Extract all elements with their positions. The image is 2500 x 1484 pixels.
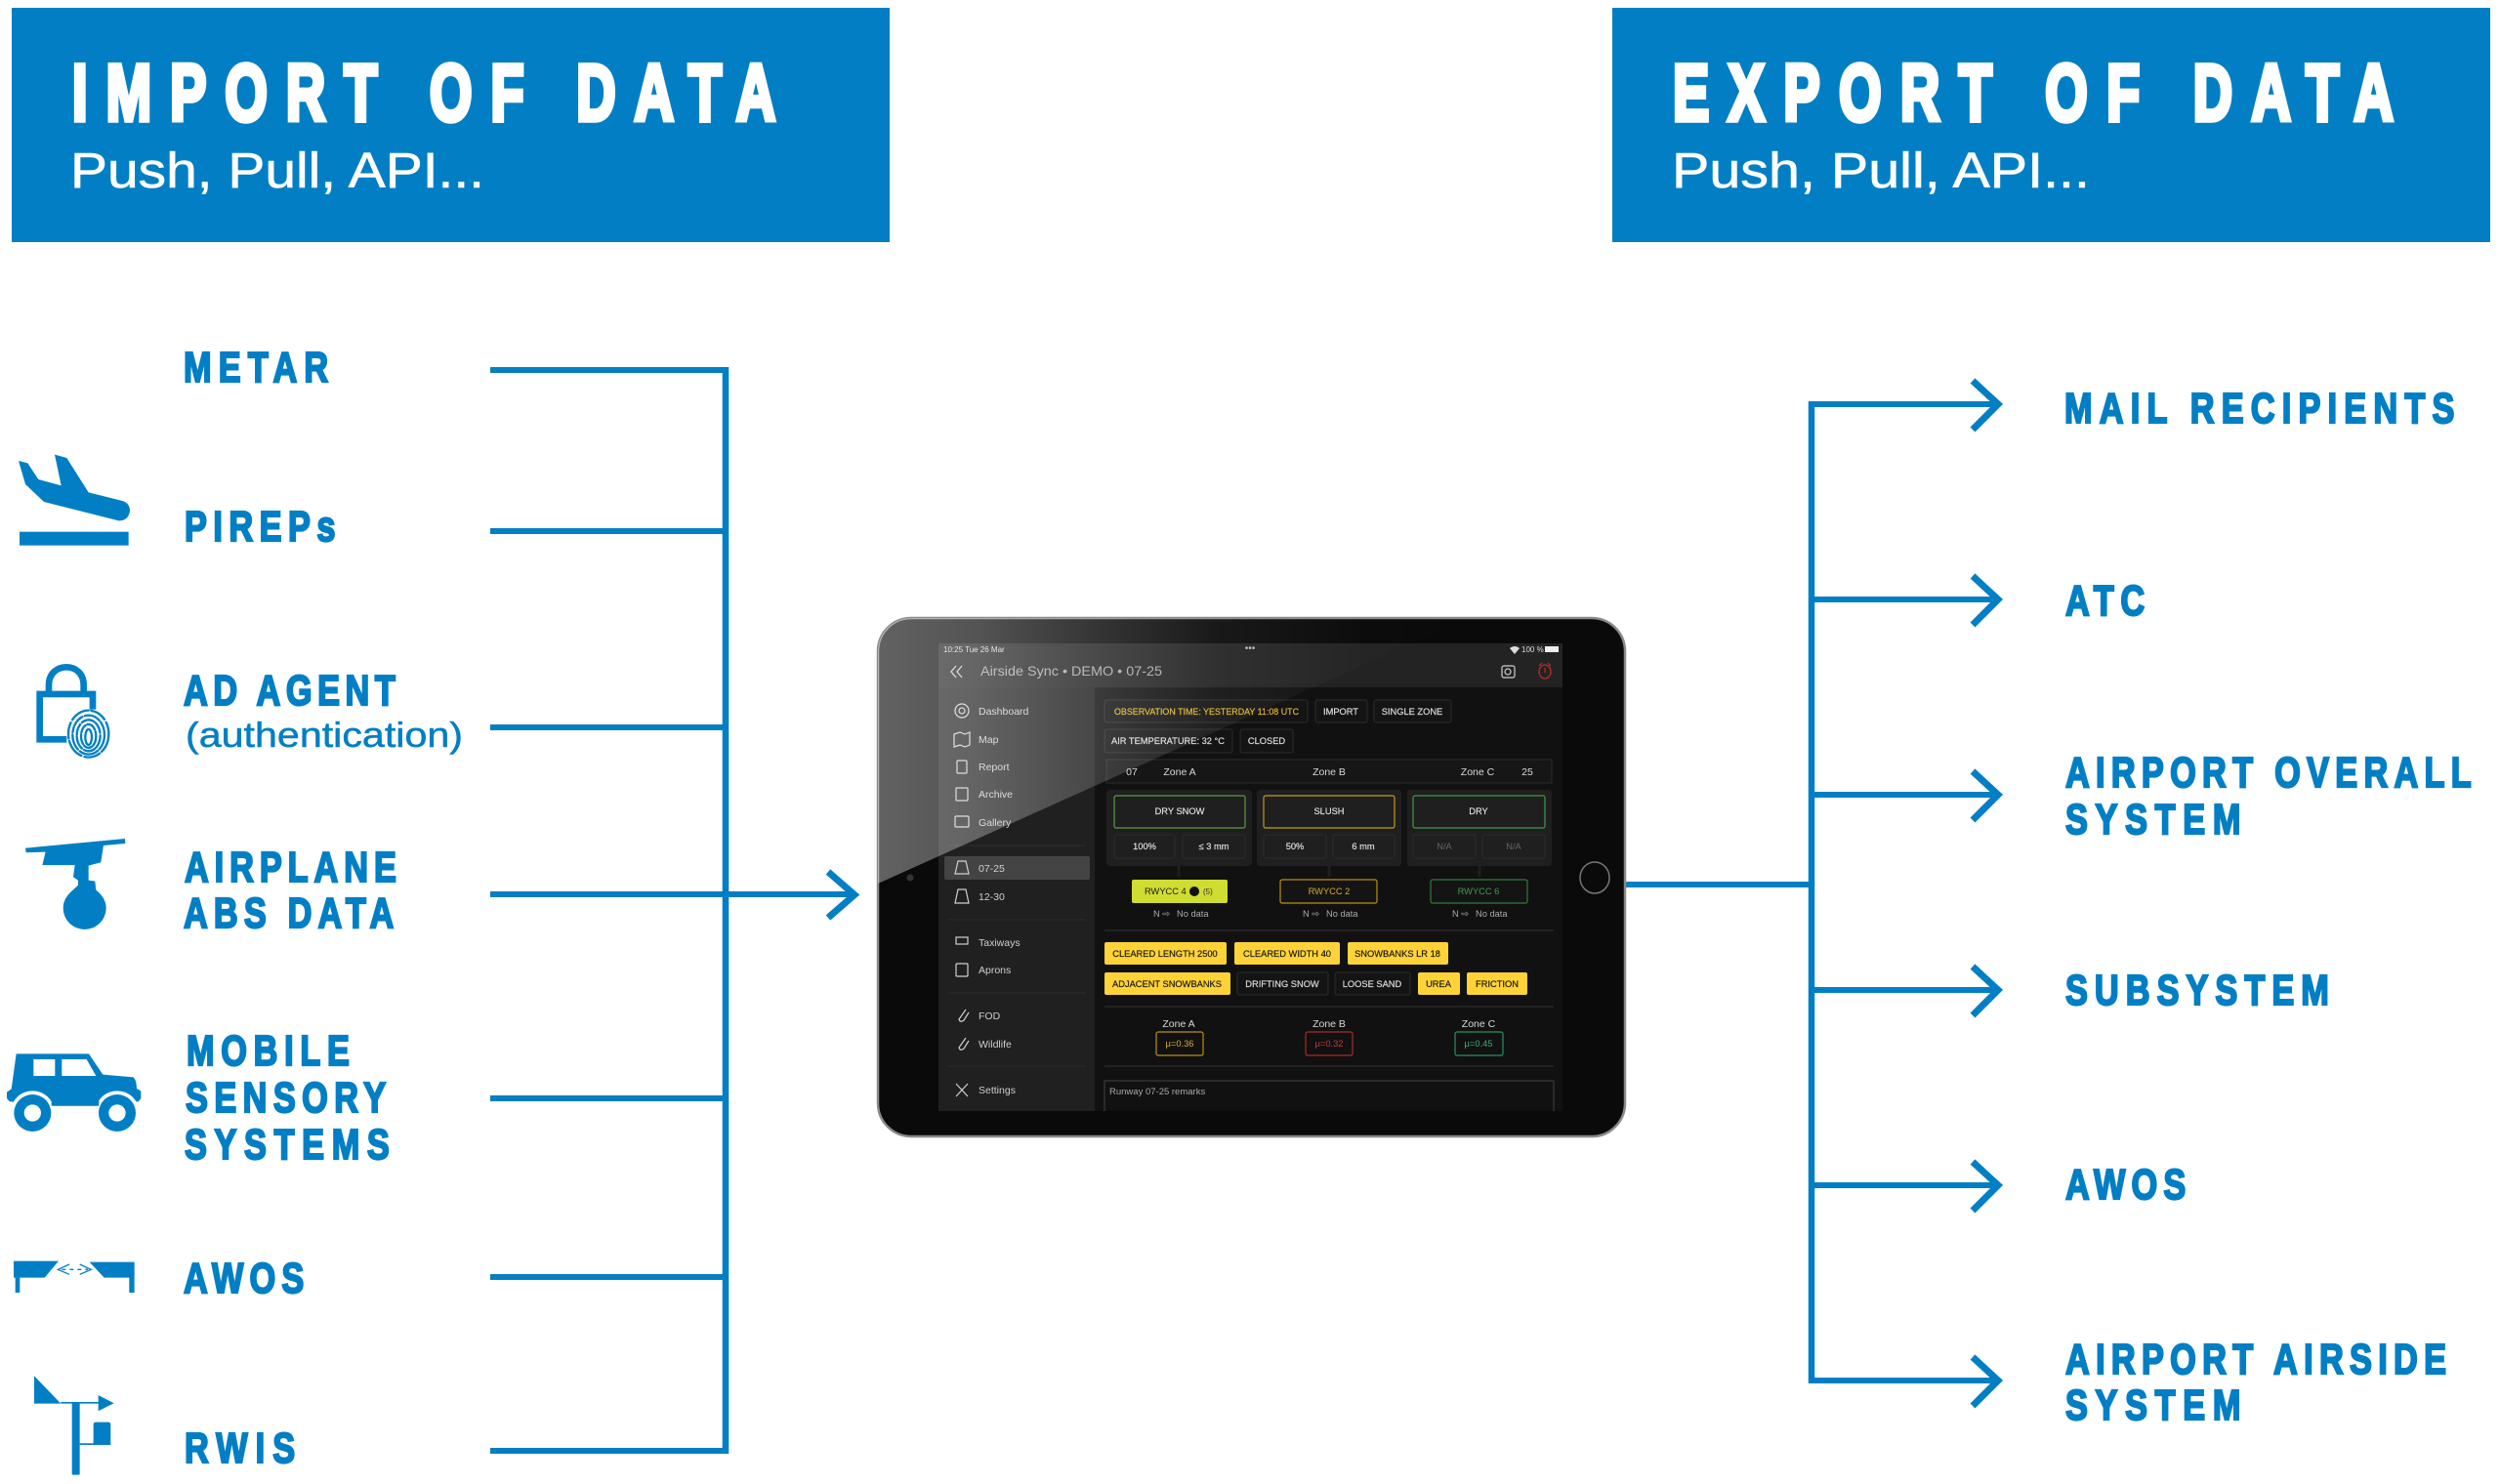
runway zone header: 07 [1126, 766, 1138, 778]
zone condition panels: ≤ 3 mm [1199, 842, 1229, 851]
RWYCC badges: No data [1177, 909, 1209, 919]
label: AWOS output: AWOS [2065, 1161, 2186, 1209]
runway zone header: Zone C [1461, 766, 1495, 778]
subheading: import methods: Push, Pull, API... [70, 143, 484, 198]
label: airplane ABS data [184, 844, 396, 937]
front camera [906, 875, 914, 881]
connector: import lines into tablet [490, 367, 854, 1454]
heading: import of data: IMPORT OF DATA [72, 48, 775, 138]
top bar: Airside Sync • DEMO • 07-25 [980, 663, 1162, 679]
icon: off-road vehicle [7, 1053, 144, 1135]
sidebar navigation: Settings [979, 1085, 1016, 1096]
zone condition panels [1106, 790, 1552, 877]
zone condition panels: N/A [1506, 842, 1522, 851]
status chips [1104, 700, 1451, 753]
friction readings: Zone C [1462, 1018, 1496, 1030]
label: airport airside system: AIRPORT AIRSIDE [2065, 1336, 2446, 1383]
contaminant chips: CLEARED LENGTH 2500 [1112, 949, 1218, 959]
friction readings: μ=0.45 [1465, 1039, 1492, 1049]
icon: plane landing [19, 455, 130, 546]
friction readings: μ=0.32 [1315, 1039, 1343, 1049]
icon: weather vane station [34, 1376, 114, 1475]
zone condition panels: DRY [1469, 806, 1488, 816]
status chips: CLOSED [1248, 736, 1285, 746]
RWYCC badges: RWYCC 4 [1145, 886, 1187, 896]
contaminant chips: CLEARED WIDTH 40 [1243, 949, 1331, 959]
RWYCC badges: No data [1476, 909, 1508, 919]
RWYCC badges: N ⇨ [1153, 909, 1170, 919]
contaminant chips: FRICTION [1476, 979, 1519, 989]
contaminant chips [1104, 942, 1527, 995]
zone condition panels: DRY SNOW [1155, 806, 1205, 816]
contaminant chips: SNOWBANKS LR 18 [1354, 949, 1440, 959]
contaminant chips: DRIFTING SNOW [1245, 979, 1319, 989]
sidebar navigation: FOD [979, 1010, 1001, 1022]
label: airport overall system [2065, 749, 2472, 844]
label: airport airside system: SYSTEM [2065, 1381, 2240, 1429]
sidebar navigation: Archive [979, 789, 1013, 801]
status chips: SINGLE ZONE [1382, 707, 1442, 717]
label: mobile sensory systems: SYSTEMS [185, 1121, 390, 1169]
label: airplane ABS data: ABS DATA [184, 889, 394, 937]
runway zone header: Zone B [1312, 766, 1346, 778]
label: airport overall system: AIRPORT OVERALL [2065, 749, 2472, 797]
label: mobile sensory systems [185, 1027, 390, 1169]
runway zone header: Zone A [1163, 766, 1196, 778]
icon: landing gear [25, 839, 125, 929]
contaminant chips: UREA [1426, 979, 1452, 989]
zone condition panels: 50% [1286, 842, 1304, 851]
label: AWOS input: AWOS [184, 1255, 304, 1302]
label: METAR: METAR [184, 344, 328, 392]
status chips: AIR TEMPERATURE: 32 °C [1111, 736, 1225, 746]
label: PIREPs: PIREPs [185, 503, 335, 551]
label: airport overall system: SYSTEM [2065, 796, 2240, 844]
friction readings: Zone B [1312, 1018, 1346, 1030]
connector: tablet out to export lines [1624, 381, 1998, 1406]
RWYCC badges: (5) [1203, 887, 1213, 896]
zone condition panels: 6 mm [1352, 842, 1375, 851]
contaminant chips: ADJACENT SNOWBANKS [1112, 979, 1222, 989]
friction readings [1156, 1018, 1503, 1055]
RWYCC badges [1132, 880, 1527, 919]
contaminant chips: LOOSE SAND [1343, 979, 1402, 989]
sidebar navigation: Report [979, 762, 1010, 773]
tablet: Airside Sync app [878, 618, 1625, 1136]
panel: import of data header [12, 8, 890, 242]
sidebar navigation: Dashboard [979, 706, 1029, 718]
sidebar navigation: Gallery [979, 817, 1012, 829]
icon: AWOS transmissometer [14, 1261, 135, 1293]
friction readings: Zone A [1162, 1018, 1195, 1030]
icon: padlock with fingerprint [40, 667, 108, 758]
home button [1580, 862, 1609, 893]
heading: export of data: EXPORT OF DATA [1673, 48, 2394, 138]
remarks box: Runway 07-25 remarks [1109, 1087, 1205, 1097]
remarks box [1104, 1081, 1554, 1111]
RWYCC badges: N ⇨ [1303, 909, 1319, 919]
zone condition panels: N/A [1437, 842, 1453, 851]
top bar [938, 643, 1562, 687]
status chips: IMPORT [1323, 707, 1358, 717]
label: AD AGENT: AD AGENT [184, 667, 396, 715]
RWYCC badges: RWYCC 2 [1309, 886, 1350, 896]
RWYCC badges: RWYCC 6 [1458, 886, 1499, 896]
sidebar navigation: Taxiways [979, 937, 1021, 949]
panel: export of data header [1612, 8, 2490, 242]
sidebar navigation: 07-25 [979, 863, 1005, 875]
sidebar navigation: Wildlife [979, 1039, 1012, 1051]
zone condition panels: SLUSH [1313, 806, 1345, 816]
sidebar navigation: 12-30 [979, 891, 1005, 903]
status chips: OBSERVATION TIME: YESTERDAY 11:08 UTC [1114, 707, 1299, 717]
top bar: 100 % [1521, 645, 1544, 654]
label: RWIS: RWIS [185, 1424, 295, 1472]
label: ATC: ATC [2065, 577, 2145, 625]
label: mobile sensory systems: SENSORY [186, 1074, 386, 1122]
label: mail recipients: MAIL RECIPIENTS [2064, 385, 2454, 433]
top bar: ••• [1245, 643, 1256, 654]
screen background [938, 643, 1562, 1111]
zone condition panels: 100% [1133, 842, 1156, 851]
label: airport airside system [2065, 1336, 2446, 1429]
sidebar navigation [938, 687, 1095, 1111]
runway zone header: 25 [1521, 766, 1533, 778]
runway zone header [1106, 760, 1552, 783]
subheading: export methods: Push, Pull, API... [1672, 143, 2090, 198]
sidebar navigation: Aprons [979, 965, 1011, 976]
RWYCC badges: No data [1326, 909, 1358, 919]
label: mobile sensory systems: MOBILE [187, 1027, 350, 1075]
screen glare [878, 618, 1293, 884]
friction readings: μ=0.36 [1166, 1039, 1193, 1049]
label: airplane ABS data: AIRPLANE [185, 844, 396, 891]
label: subsystem: SUBSYSTEM [2065, 967, 2329, 1014]
RWYCC badges: N ⇨ [1452, 909, 1469, 919]
top bar: 10:25 Tue 26 Mar [943, 645, 1005, 654]
sidebar navigation: Map [979, 734, 999, 746]
label: authentication: (authentication) [186, 715, 463, 755]
